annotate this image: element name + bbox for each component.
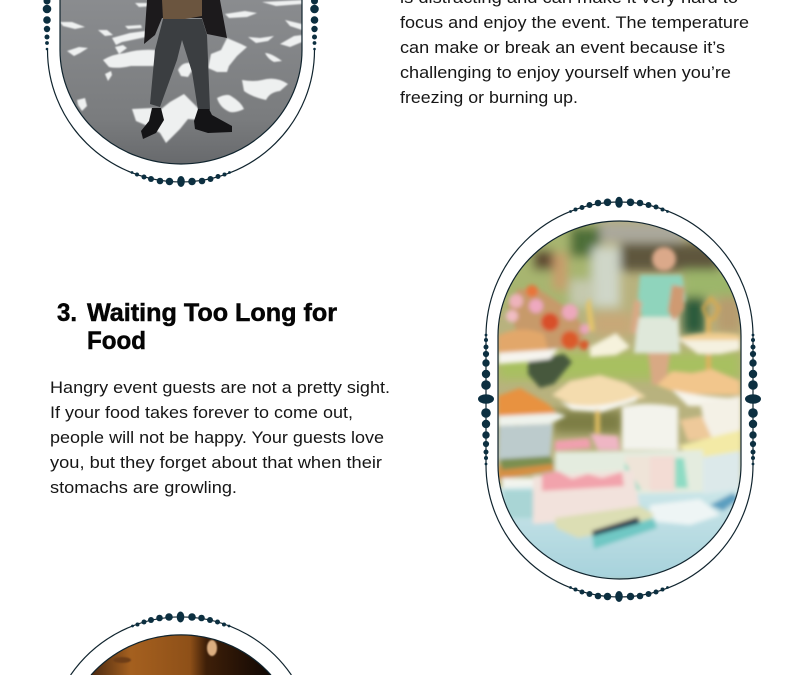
text block: hangry guests paragraph: stomachs are growling. bbox=[50, 478, 237, 497]
frame line bbox=[71, 617, 291, 675]
photo: dessert table outdoors bbox=[498, 220, 741, 580]
panel: arch photo of dessert table bbox=[478, 197, 761, 602]
text block: hangry guests paragraph: Hangry event guests are not a pretty sight. bbox=[50, 378, 390, 397]
text block: hangry guests paragraph: If your food takes forever to come out, bbox=[50, 403, 353, 422]
text block: temperature paragraph bbox=[400, 0, 749, 107]
panel: arch photo of person standing on ice bbox=[43, 0, 319, 187]
white stack bbox=[622, 404, 678, 450]
frame line bbox=[48, 50, 314, 182]
top bead chain bbox=[569, 197, 669, 213]
coat bbox=[144, 0, 227, 44]
bottom bead chain bbox=[569, 586, 669, 602]
middle plates bbox=[590, 333, 630, 357]
right cake stand bbox=[703, 298, 719, 319]
text block: temperature paragraph: can make or break an event because it’s bbox=[400, 38, 725, 57]
text block: temperature paragraph: focus and enjoy the event. The temperature bbox=[400, 13, 749, 32]
right bead chain bbox=[745, 334, 761, 465]
left pastries bbox=[498, 329, 548, 354]
left bead chain bbox=[43, 0, 51, 50]
heading: 3. Waiting Too Long for Food bbox=[57, 299, 337, 355]
pink small cakes bbox=[555, 438, 591, 451]
right bead chain bbox=[310, 0, 319, 50]
frame line bbox=[486, 202, 753, 597]
pink cake bbox=[533, 470, 641, 524]
text block: hangry guests paragraph: people will not be happy. Your guests love bbox=[50, 428, 384, 447]
flowers bbox=[508, 289, 588, 350]
sweater bbox=[162, 0, 202, 19]
top bead chain bbox=[131, 612, 230, 627]
photo border bbox=[60, 0, 302, 164]
bottom bead chain bbox=[131, 171, 231, 187]
table bbox=[500, 484, 738, 578]
photo border bbox=[498, 221, 741, 579]
photo border bbox=[91, 635, 271, 675]
heading: 3. Waiting Too Long for Food: Food bbox=[87, 327, 146, 355]
text block: hangry guests paragraph: you, but they forget about that when their bbox=[50, 453, 382, 472]
text block: temperature paragraph: challenging to enjoy yourself when you’re bbox=[400, 63, 731, 82]
woman bbox=[652, 247, 676, 271]
text block: hangry guests paragraph bbox=[50, 378, 390, 497]
lower left pastry bbox=[498, 462, 554, 480]
trousers bbox=[150, 19, 210, 110]
boots bbox=[141, 108, 164, 139]
panel: arch photo cropped at bottom edge bbox=[71, 612, 291, 675]
left bead chain bbox=[478, 334, 494, 465]
photo: person on icy ground bbox=[60, 0, 302, 170]
glass vase bbox=[498, 424, 553, 460]
heading: 3. Waiting Too Long for Food: 3. bbox=[57, 299, 77, 327]
heading: 3. Waiting Too Long for Food: Waiting Too Long for bbox=[87, 299, 337, 327]
text block: temperature paragraph: freezing or burning up. bbox=[400, 88, 578, 107]
photo: warm brown scene bbox=[91, 635, 271, 675]
